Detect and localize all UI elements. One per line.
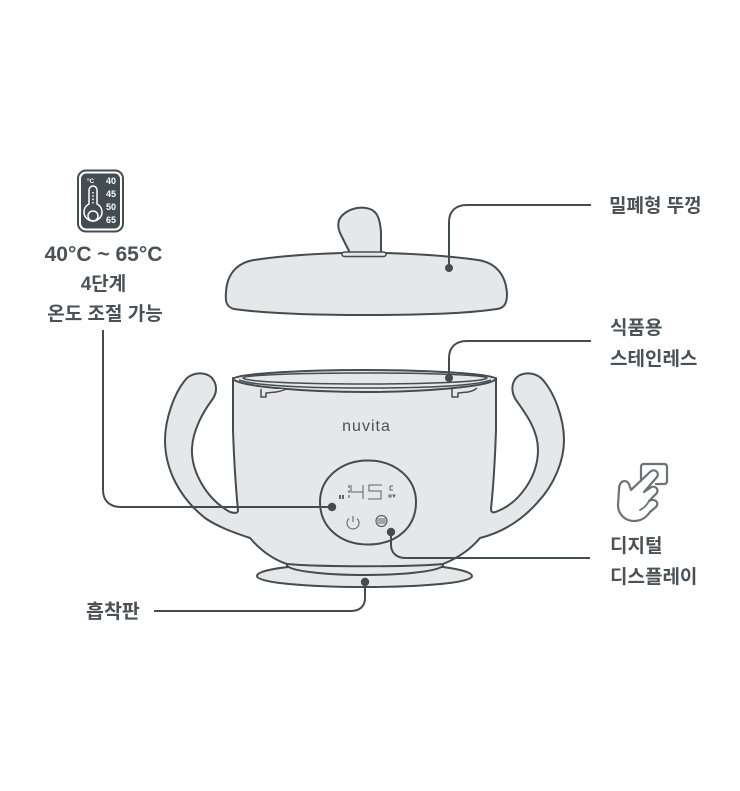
pot base skirt — [287, 562, 443, 575]
icon: menu button — [376, 516, 387, 526]
label: digital display: 디지털 — [610, 535, 662, 557]
label: airtight lid: 밀폐형 뚜껑 — [609, 195, 702, 217]
control panel — [320, 460, 416, 544]
pot — [165, 370, 564, 587]
temperature label — [45, 243, 163, 325]
temperature label: 4단계 — [81, 273, 126, 295]
leader line: temperature — [103, 330, 336, 511]
rim — [233, 370, 496, 392]
digital readout — [340, 485, 395, 499]
icon: power button — [347, 516, 359, 529]
label: digital display — [610, 535, 697, 588]
label: digital display: 디스플레이 — [610, 566, 697, 588]
leader line: display — [387, 528, 590, 558]
icon: thermometer: 50 — [106, 202, 116, 212]
label: food-grade stainless: 식품용 — [610, 317, 662, 339]
icon: thermometer: 65 — [106, 215, 116, 225]
temperature label: 온도 조절 가능 — [47, 303, 163, 325]
pot body and handles — [165, 373, 564, 566]
lid ring — [342, 252, 386, 256]
leader line: suction plate — [154, 578, 369, 611]
panel outline — [320, 460, 416, 544]
temperature label: 40°C ~ 65°C — [45, 243, 162, 266]
label: food-grade stainless: 스테인레스 — [610, 348, 697, 370]
icon: touch hand — [618, 464, 667, 521]
brand logo: nuvita — [342, 418, 391, 435]
label: suction plate: 흡착판 — [86, 601, 140, 623]
icon: thermometer: °C — [87, 177, 94, 185]
icon: thermometer: 40 — [106, 176, 116, 186]
right rim clip — [452, 388, 477, 397]
left rim clip — [261, 389, 286, 397]
lid — [226, 208, 507, 315]
icon: thermometer — [78, 170, 123, 232]
lid dome — [226, 253, 507, 315]
icon: thermometer: 45 — [106, 189, 116, 199]
leader line: stainless — [445, 341, 591, 382]
lid knob — [338, 208, 381, 253]
suction plate — [257, 567, 472, 587]
label: food-grade stainless — [610, 317, 697, 370]
leader line: lid — [445, 205, 591, 272]
